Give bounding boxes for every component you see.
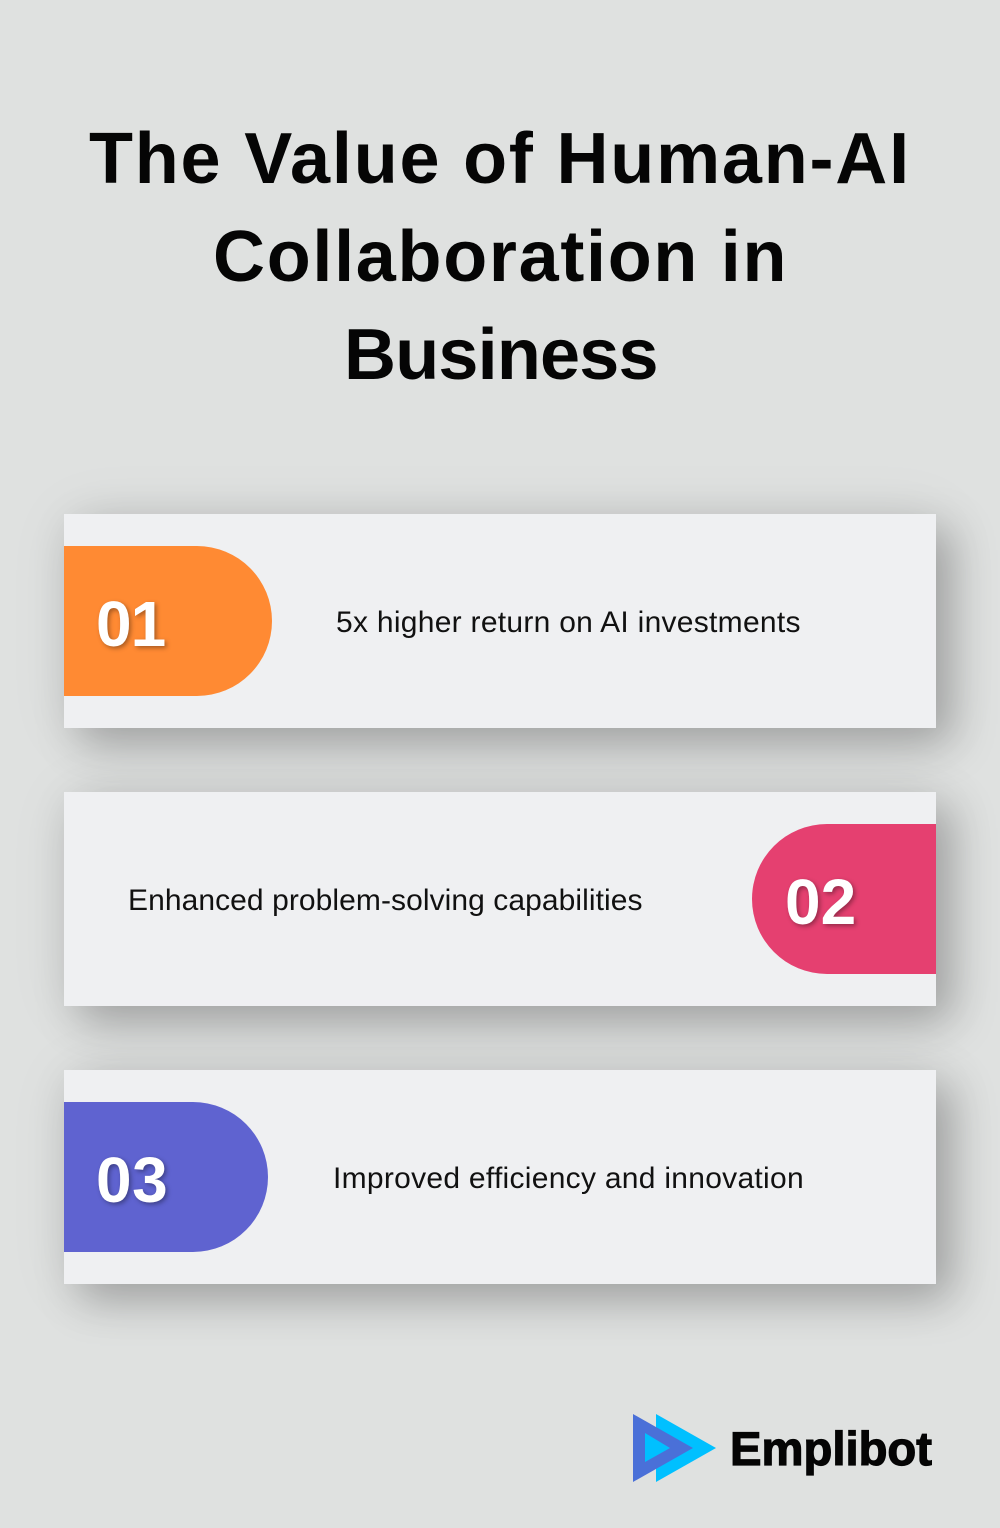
icon: play arrows xyxy=(633,1414,716,1482)
title: Collaboration in xyxy=(213,217,788,297)
panel: item 02 xyxy=(64,792,936,1006)
panel: item 03 xyxy=(64,1070,936,1284)
wordmark: Emplibot xyxy=(730,1422,932,1475)
badge 02: 02 xyxy=(785,866,856,938)
title: Business xyxy=(344,315,658,395)
title xyxy=(89,119,911,395)
title: The Value of Human-AI xyxy=(89,119,911,199)
badge 02 xyxy=(752,824,936,974)
text: item 01: 5x higher return on AI investments xyxy=(336,606,801,639)
badge 03 xyxy=(64,1102,268,1252)
panel: item 01 xyxy=(64,514,936,728)
badge 03: 03 xyxy=(96,1144,168,1216)
logo: Emplibot xyxy=(633,1414,932,1482)
text: item 02: Enhanced problem-solving capabilities xyxy=(128,884,643,917)
text: item 03: Improved efficiency and innovation xyxy=(333,1162,804,1195)
badge 01 xyxy=(64,546,272,696)
badge 01: 01 xyxy=(96,588,165,660)
